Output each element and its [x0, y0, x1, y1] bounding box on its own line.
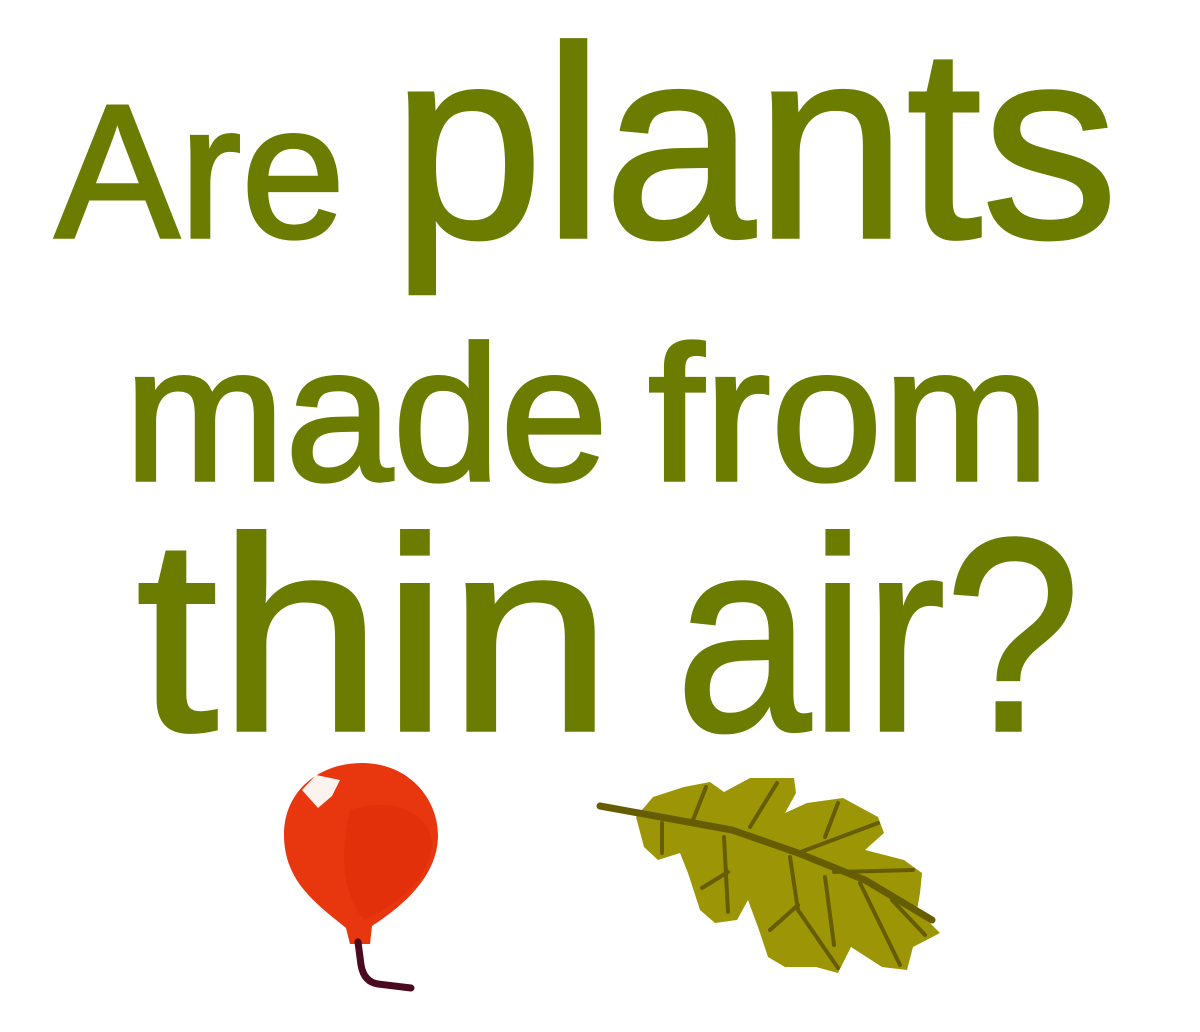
title: thin [136, 482, 612, 789]
icon: oak leaf [600, 778, 940, 973]
title: plants [392, 0, 1118, 296]
title: Are [55, 66, 345, 278]
title: from [648, 306, 1050, 521]
title [55, 0, 1118, 789]
title: air? [676, 482, 1080, 789]
title: made [124, 306, 608, 521]
icon: red berry [284, 763, 438, 988]
